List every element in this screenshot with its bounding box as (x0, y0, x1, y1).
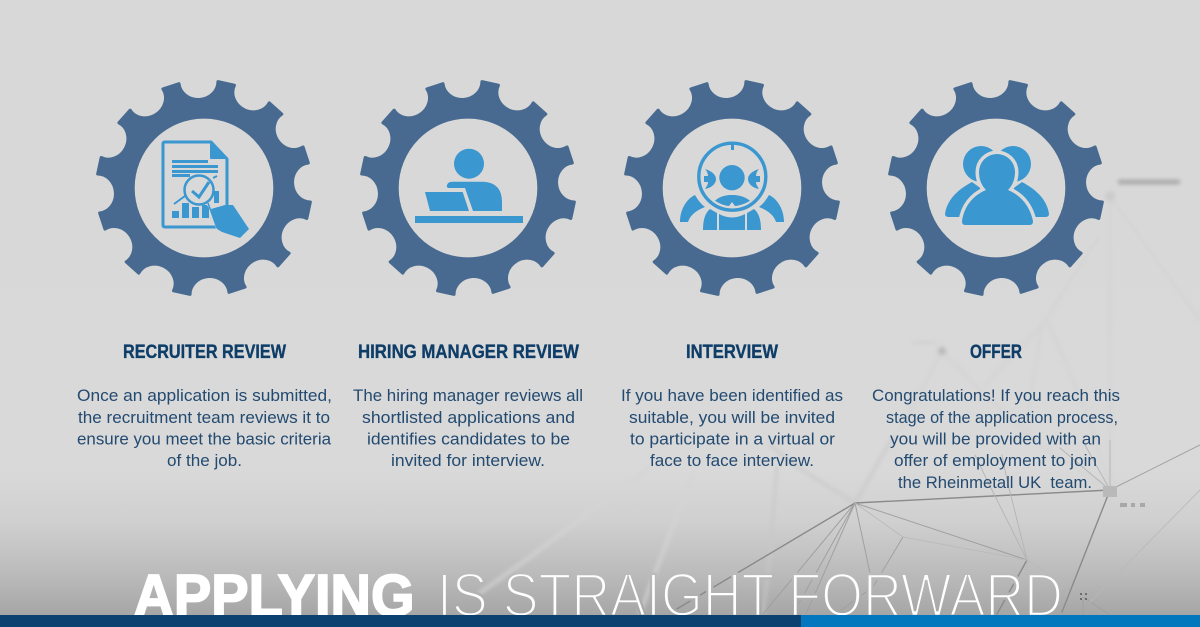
network graphic: blurred distant lines (480, 180, 1200, 613)
heading: recruiter review: RECRUITER REVIEW (123, 342, 286, 363)
gear: interview (626, 82, 838, 294)
gear: offer (890, 82, 1102, 294)
network graphic: sharp foreground lines (670, 440, 1200, 615)
text: offer (872, 387, 1120, 492)
text: interview: to participate in a virtual or (630, 430, 836, 448)
footer bar: bright blue (801, 615, 1200, 627)
text: recruiter review: ensure you meet the basic criteria (77, 430, 332, 448)
icon: group of people (945, 146, 1049, 225)
text: interview: suitable, you will be invited (629, 409, 835, 427)
title (134, 561, 1063, 627)
text: offer: the Rheinmetall UK team. (898, 474, 1092, 492)
heading: hiring manager review: HIRING MANAGER REVIEW (358, 342, 579, 363)
icon: interview person in helmet (680, 143, 784, 230)
text: recruiter review: Once an application is submitted, (77, 387, 332, 405)
heading: interview: INTERVIEW (686, 342, 778, 363)
text: hiring manager review: The hiring manager reviews all (353, 387, 583, 405)
heading: offer: OFFER (970, 342, 1022, 363)
text: recruiter review: of the job. (167, 452, 242, 470)
text: hiring manager review (353, 387, 583, 470)
footer bar: dark blue (0, 615, 801, 627)
icon: document with magnifier (163, 142, 249, 238)
text: offer: offer of employment to join (894, 452, 1097, 470)
gear: recruiter review (98, 82, 310, 294)
text: interview: If you have been identified as (621, 387, 843, 405)
text: offer: you will be provided with an (890, 430, 1101, 448)
text: interview: face to face interview. (650, 452, 814, 470)
gear: hiring manager review (362, 82, 574, 294)
text: hiring manager review: invited for interview. (391, 452, 545, 470)
icon: person at laptop (415, 149, 523, 223)
text: hiring manager review: shortlisted applications and (362, 409, 575, 427)
text: offer: stage of the application process, (886, 409, 1118, 427)
text: offer: Congratulations! If you reach this (872, 387, 1120, 405)
title: IS STRAIGHT FORWARD (437, 561, 1063, 627)
text: recruiter review: the recruitment team reviews it to (78, 409, 330, 427)
text: interview (621, 387, 843, 470)
text: hiring manager review: identifies candidates to be (367, 430, 570, 448)
text: recruiter review (77, 387, 332, 470)
